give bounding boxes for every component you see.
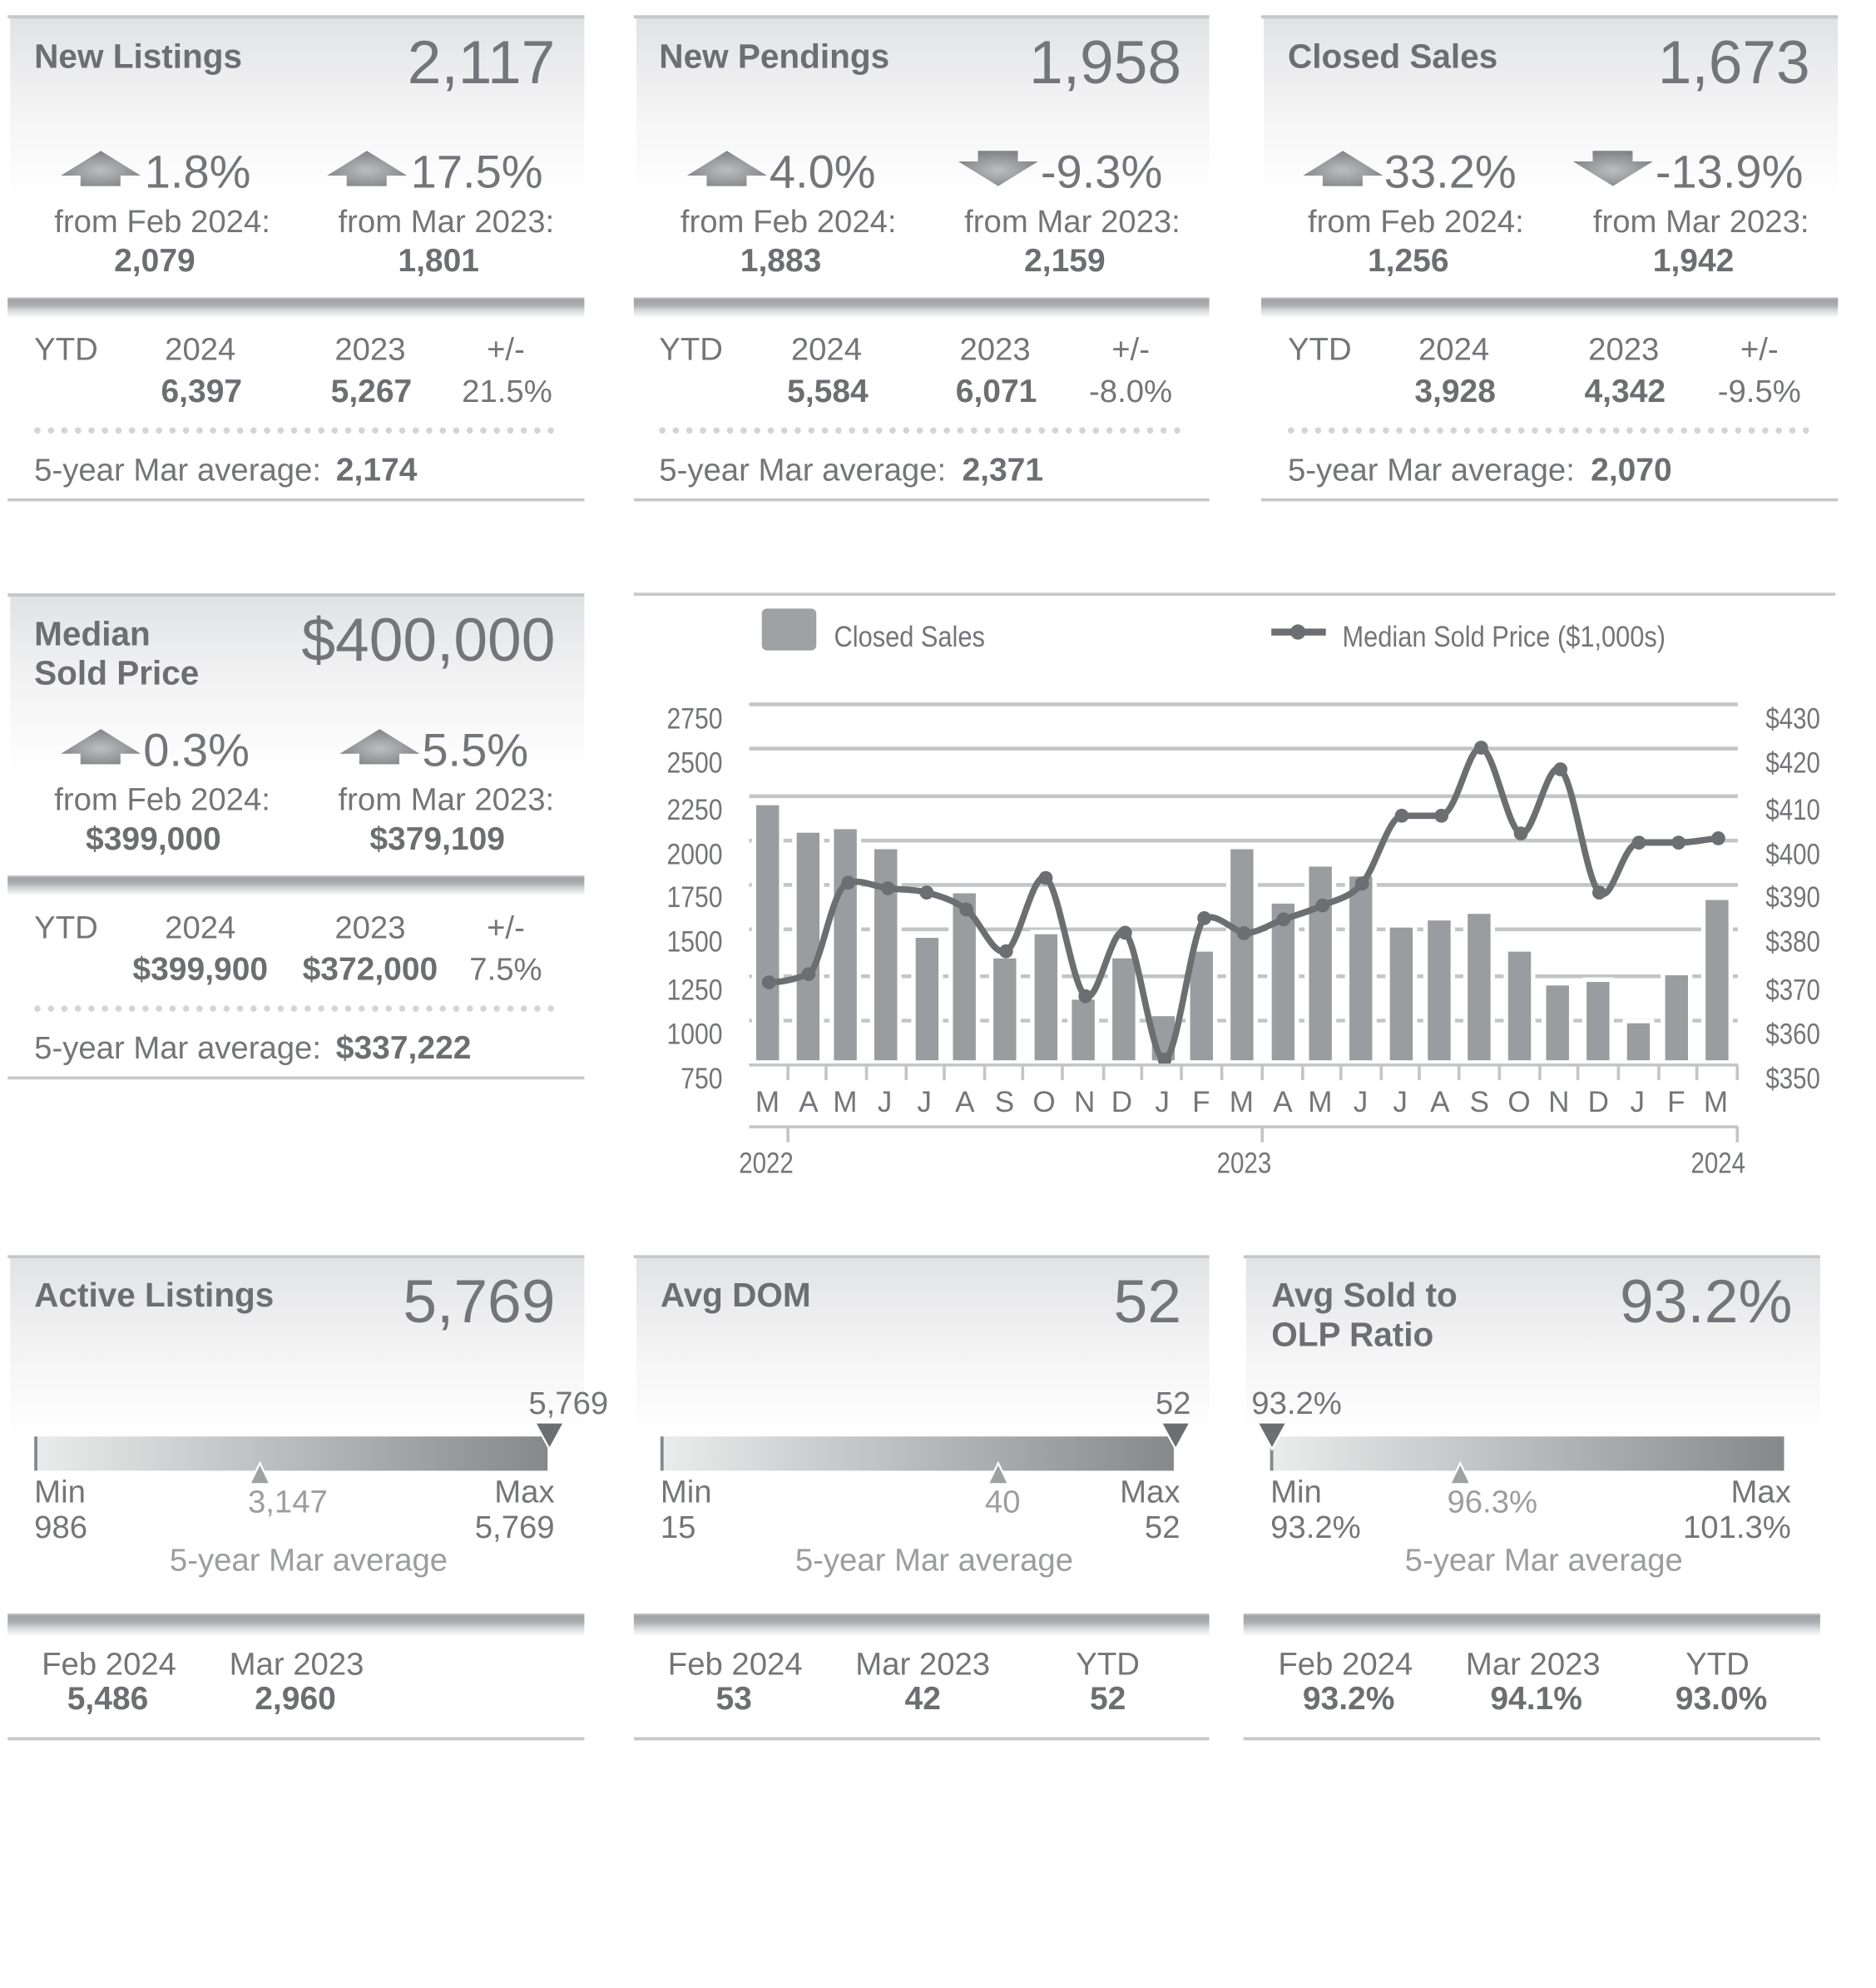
month labels: J <box>1354 1086 1368 1118</box>
month labels: M <box>1308 1086 1332 1118</box>
month labels: A <box>955 1086 975 1118</box>
left axis labels: 1250 <box>666 974 722 1006</box>
month labels: A <box>1430 1086 1450 1118</box>
min: 15 <box>661 1510 695 1545</box>
max: Max <box>1120 1474 1181 1510</box>
icon: up arrow <box>61 729 141 764</box>
x axis with ticks <box>749 1065 1738 1080</box>
YTD table: 2024 <box>791 332 862 368</box>
month labels: F <box>1192 1086 1210 1118</box>
change from Feb 2024: 1.8% <box>145 145 250 197</box>
heading: New Listings: New Listings <box>34 37 242 76</box>
value: 5,769: 5,769 <box>403 1268 555 1336</box>
label: from Feb 2024: from Feb 2024: <box>54 782 270 818</box>
value: Mar 2023: 2,159 <box>1024 243 1106 279</box>
left axis labels: 2750 <box>666 702 722 735</box>
YTD table: YTD <box>1288 332 1352 368</box>
comparisons: Feb 2024 <box>668 1647 803 1683</box>
max: 5,769 <box>475 1510 555 1545</box>
YTD table: YTD <box>659 332 723 368</box>
panel: Closed Sales <box>1261 15 1838 501</box>
value: 1,958: 1,958 <box>1029 29 1181 97</box>
month labels: N <box>1548 1086 1569 1118</box>
YTD table: 3,928 <box>1414 374 1496 409</box>
left axis labels: 750 <box>681 1063 722 1095</box>
panel: New Listings <box>7 15 584 501</box>
comparisons: 94.1% <box>1490 1681 1582 1717</box>
month labels: M <box>1704 1086 1728 1118</box>
YTD table: 5,584 <box>787 374 869 409</box>
current label: 52 <box>1156 1386 1190 1421</box>
panel: Avg Sold to OLP Ratio <box>1244 1255 1820 1740</box>
YTD table: 7.5% <box>469 952 542 988</box>
value: 52: 52 <box>1114 1268 1181 1336</box>
year labels <box>739 1147 1745 1179</box>
average caption: 5-year Mar average <box>170 1543 448 1579</box>
min: Min <box>661 1474 712 1510</box>
comparisons: Mar 2023 <box>230 1647 364 1683</box>
left axis labels: 1750 <box>666 881 722 914</box>
comparisons: Feb 2024 <box>1278 1647 1413 1683</box>
max: 52 <box>1145 1510 1181 1545</box>
5-year average: 2,174 <box>336 452 418 488</box>
average marker <box>250 1463 270 1484</box>
change from Feb 2024: 4.0% <box>770 145 876 197</box>
panel: Avg DOM <box>634 1255 1210 1740</box>
comparisons: YTD <box>1685 1647 1750 1683</box>
month labels <box>755 1086 1728 1118</box>
icon: up arrow <box>687 151 767 186</box>
YTD table: 21.5% <box>462 374 552 409</box>
month labels: S <box>1470 1086 1489 1118</box>
right axis labels: $350 <box>1765 1063 1820 1095</box>
average marker <box>1450 1463 1470 1484</box>
YTD table: 2023 <box>959 332 1031 368</box>
month labels: M <box>1230 1086 1254 1118</box>
month labels: M <box>755 1086 780 1118</box>
5-year average: 5-year Mar average: <box>1288 452 1575 488</box>
YTD table: 5,267 <box>331 374 412 409</box>
month labels: D <box>1588 1086 1609 1118</box>
value: Mar 2023: $379,109 <box>369 821 505 857</box>
value: 1,673: 1,673 <box>1658 29 1810 97</box>
right axis labels: $390 <box>1765 881 1820 914</box>
YTD table: +/- <box>487 332 525 368</box>
5-year average: 5-year Mar average: <box>659 452 946 488</box>
value: Feb 2024: 1,883 <box>740 243 821 279</box>
5-year average <box>34 1030 471 1066</box>
month labels: A <box>799 1086 819 1118</box>
YTD table: $399,900 <box>132 952 268 988</box>
5-year average: 5-year Mar average: <box>34 1030 321 1066</box>
right axis labels: $360 <box>1765 1019 1820 1051</box>
left axis labels: 1000 <box>666 1019 722 1051</box>
right axis labels: $430 <box>1765 702 1820 735</box>
heading: Median Sold Price: Sold Price <box>34 654 199 692</box>
line: Median Sold Price <box>762 741 1725 1067</box>
icon: down arrow <box>958 151 1038 186</box>
average caption: 5-year Mar average <box>795 1543 1073 1579</box>
heading: Active Listings: Active Listings <box>34 1276 274 1314</box>
current marker <box>1257 1422 1286 1449</box>
comparisons: YTD <box>1076 1647 1140 1683</box>
change from Mar 2023: -13.9% <box>1656 145 1803 197</box>
left axis labels: 1500 <box>666 925 722 958</box>
max: Max <box>494 1474 555 1510</box>
current marker <box>1161 1422 1190 1449</box>
value: $400,000: $400,000 <box>301 607 555 674</box>
icon: up arrow <box>1303 151 1383 186</box>
comparisons: 53 <box>716 1681 752 1717</box>
YTD table: +/- <box>1740 332 1779 368</box>
YTD table: 2024 <box>1418 332 1489 368</box>
YTD table: YTD <box>34 332 98 368</box>
legend: Median Sold Price: Median Sold Price ($1,000s) <box>1343 621 1666 653</box>
YTD table: 2023 <box>1588 332 1659 368</box>
month labels: A <box>1273 1086 1293 1118</box>
YTD table: 2024 <box>165 332 235 368</box>
year axis <box>749 1127 1738 1143</box>
comparisons <box>1278 1647 1767 1717</box>
month labels: F <box>1667 1086 1685 1118</box>
max: Max <box>1731 1474 1791 1510</box>
heading: Median Sold Price: Median <box>34 615 151 653</box>
YTD table: 6,071 <box>956 374 1037 409</box>
label: from Feb 2024: from Feb 2024: <box>54 204 270 240</box>
comparisons: Mar 2023 <box>1466 1647 1601 1683</box>
panel: combo chart <box>634 592 1835 1179</box>
min: 93.2% <box>1270 1510 1361 1545</box>
right axis labels: $370 <box>1765 974 1820 1006</box>
panel: Median Sold Price <box>7 593 584 1079</box>
value: Mar 2023: 1,801 <box>398 243 479 279</box>
range bar <box>661 1422 1190 1484</box>
average marker <box>988 1463 1008 1484</box>
bars: Closed Sales <box>756 806 1729 1060</box>
label: from Mar 2023: from Mar 2023: <box>964 204 1181 240</box>
month labels: M <box>833 1086 857 1118</box>
year labels: 2023 <box>1217 1147 1271 1179</box>
heading: Avg Sold to OLP Ratio: Avg Sold to <box>1271 1276 1458 1314</box>
label: from Mar 2023: from Mar 2023: <box>339 204 554 240</box>
current marker <box>535 1422 564 1449</box>
comparisons: 2,960 <box>255 1681 336 1717</box>
right axis labels: $400 <box>1765 838 1820 870</box>
year labels: 2022 <box>739 1147 794 1179</box>
label: from Feb 2024: from Feb 2024: <box>681 204 897 240</box>
left axis labels: 2250 <box>666 794 722 826</box>
YTD table <box>34 910 542 988</box>
change from Feb 2024: 33.2% <box>1384 145 1517 197</box>
value: 2,117: 2,117 <box>408 29 555 97</box>
value: 93.2%: 93.2% <box>1620 1268 1792 1336</box>
icon: down arrow <box>1573 151 1653 186</box>
month labels: O <box>1507 1086 1531 1118</box>
left axis labels <box>666 702 722 1095</box>
comparisons: 52 <box>1090 1681 1126 1717</box>
min: 986 <box>34 1510 87 1545</box>
label: from Mar 2023: from Mar 2023: <box>1593 204 1809 240</box>
comparisons <box>668 1647 1140 1717</box>
panel: Active Listings <box>7 1255 608 1740</box>
range bar <box>1257 1422 1784 1484</box>
label: from Mar 2023: from Mar 2023: <box>339 782 554 818</box>
change from Mar 2023: 5.5% <box>422 723 528 776</box>
YTD table: 2023 <box>334 910 406 945</box>
YTD table: YTD <box>34 910 98 945</box>
YTD table: +/- <box>1111 332 1150 368</box>
YTD table <box>659 332 1172 409</box>
month labels: O <box>1032 1086 1056 1118</box>
5-year average: 5-year Mar average: <box>34 452 321 488</box>
5-year average: 2,371 <box>962 452 1043 488</box>
max: 101.3% <box>1683 1510 1791 1545</box>
average value: 40 <box>985 1485 1021 1520</box>
label: from Feb 2024: from Feb 2024: <box>1308 204 1524 240</box>
month labels: J <box>1630 1086 1645 1118</box>
change from Mar 2023: 17.5% <box>411 145 543 197</box>
YTD table <box>34 332 552 409</box>
legend: Closed Sales <box>762 608 985 653</box>
change from Feb 2024: 0.3% <box>143 723 250 776</box>
YTD table: 2023 <box>334 332 406 368</box>
month labels: J <box>878 1086 892 1118</box>
range bar <box>34 1422 564 1484</box>
value: Feb 2024: 1,256 <box>1368 243 1449 279</box>
YTD table <box>1288 332 1801 409</box>
comparisons: Mar 2023 <box>855 1647 990 1683</box>
right axis labels: $420 <box>1765 747 1820 780</box>
value: Feb 2024: 2,079 <box>114 243 196 279</box>
min: Min <box>34 1474 86 1510</box>
comparisons: 5,486 <box>67 1681 148 1717</box>
right axis labels: $410 <box>1765 794 1820 826</box>
change from Mar 2023: -9.3% <box>1041 145 1162 197</box>
current label: 5,769 <box>528 1386 608 1421</box>
comparisons: 93.2% <box>1303 1681 1394 1717</box>
right axis labels: $380 <box>1765 925 1820 958</box>
YTD table: +/- <box>487 910 525 945</box>
month labels: J <box>1155 1086 1170 1118</box>
icon: up arrow <box>339 729 419 764</box>
comparisons: 42 <box>905 1681 941 1717</box>
left axis labels: 2500 <box>666 747 722 780</box>
icon: up arrow <box>61 151 141 186</box>
comparisons <box>42 1647 364 1717</box>
grid lines <box>749 705 1738 1020</box>
heading: Avg Sold to OLP Ratio: OLP Ratio <box>1271 1315 1433 1353</box>
heading: Avg DOM: Avg DOM <box>661 1276 811 1314</box>
YTD table: 4,342 <box>1584 374 1666 409</box>
month labels: D <box>1111 1086 1132 1118</box>
YTD table: 2024 <box>165 910 235 945</box>
value: Feb 2024: $399,000 <box>86 821 221 857</box>
min: Min <box>1270 1474 1322 1510</box>
legend: Closed Sales: Closed Sales <box>834 621 985 653</box>
comparisons: Feb 2024 <box>42 1647 176 1683</box>
YTD table: 6,397 <box>161 374 242 409</box>
comparisons: 93.0% <box>1676 1681 1767 1717</box>
average caption: 5-year Mar average <box>1405 1543 1683 1579</box>
panel: New Pendings <box>634 15 1210 501</box>
5-year average: 2,070 <box>1591 452 1672 488</box>
left axis labels: 2000 <box>666 838 722 870</box>
YTD table: -8.0% <box>1089 374 1172 409</box>
icon: up arrow <box>327 151 407 186</box>
heading: Closed Sales: Closed Sales <box>1288 37 1497 76</box>
month labels: N <box>1074 1086 1095 1118</box>
YTD table: $372,000 <box>303 952 438 988</box>
value: Mar 2023: 1,942 <box>1653 243 1734 279</box>
YTD table: -9.5% <box>1718 374 1801 409</box>
month labels: J <box>917 1086 932 1118</box>
right axis labels <box>1765 702 1820 1095</box>
current label: 93.2% <box>1251 1386 1342 1421</box>
5-year average: $337,222 <box>336 1030 471 1066</box>
average value: 3,147 <box>248 1485 328 1520</box>
year labels: 2024 <box>1691 1147 1745 1179</box>
average value: 96.3% <box>1447 1485 1537 1520</box>
month labels: J <box>1393 1086 1408 1118</box>
heading: New Pendings: New Pendings <box>659 37 889 76</box>
month labels: S <box>995 1086 1014 1118</box>
